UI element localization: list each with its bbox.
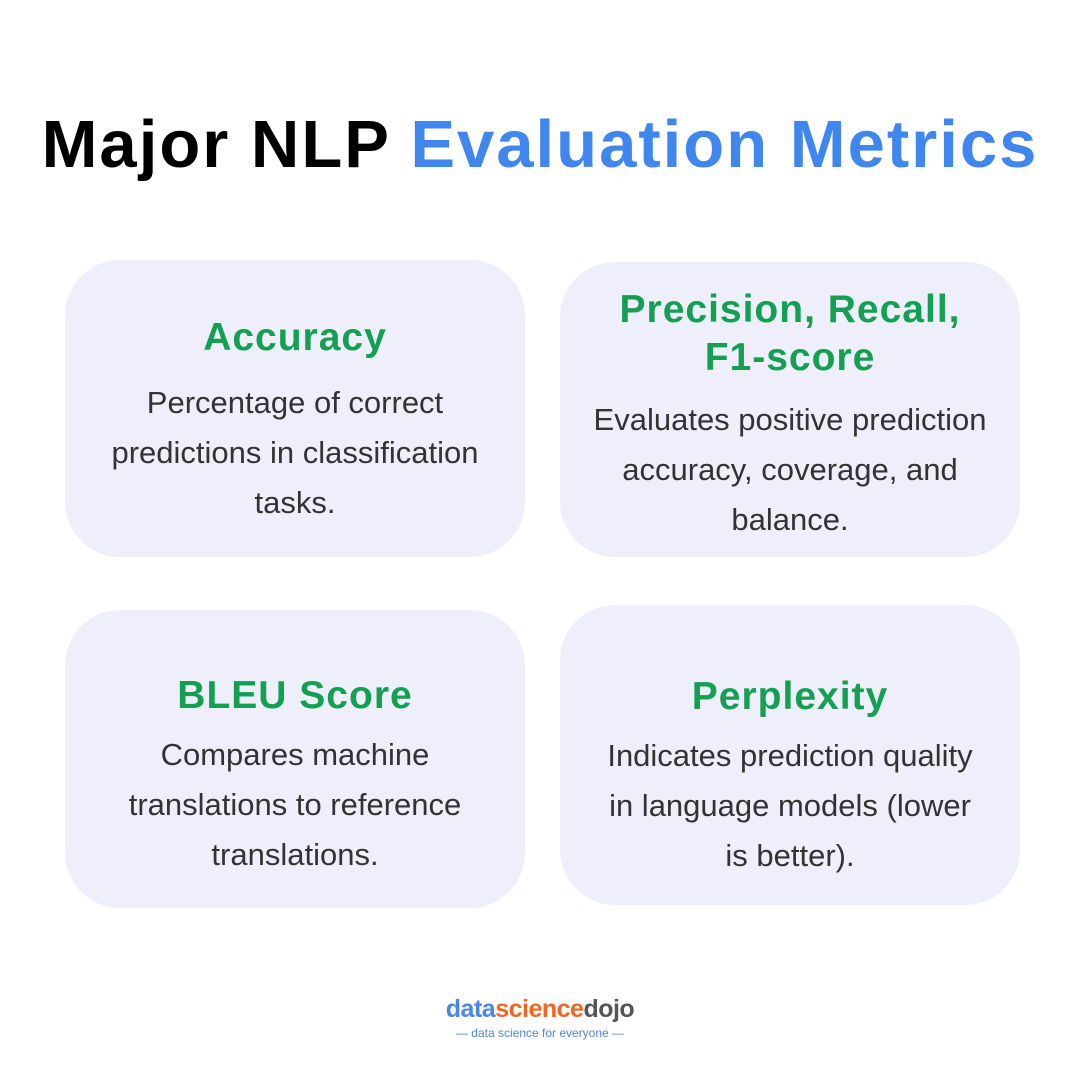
panel: bleu [65,610,525,908]
heading: bleu: BLEU Score [177,674,413,717]
heading: accuracy: Accuracy [203,316,387,359]
heading: precision: Precision, Recall, [620,288,960,331]
text: perplexity: Indicates prediction quality in language models (lower is better). [607,738,973,873]
logo [446,995,634,1040]
panel: accuracy [65,260,525,557]
logo: — data science for everyone — [456,1026,624,1040]
title: Major NLP Evaluation Metrics [42,107,1038,182]
heading: perplexity: Perplexity [692,675,888,718]
text: accuracy: Percentage of correct predictions in classification tasks. [111,385,478,520]
logo: datasciencedojo [446,995,634,1023]
panel: precision [560,262,1020,557]
heading: precision [620,288,960,379]
text: precision: Evaluates positive prediction accuracy, coverage, and balance. [594,402,986,537]
panel: perplexity [560,605,1020,905]
heading: precision: F1-score [705,336,875,379]
text: bleu: Compares machine translations to reference translations. [129,737,461,872]
